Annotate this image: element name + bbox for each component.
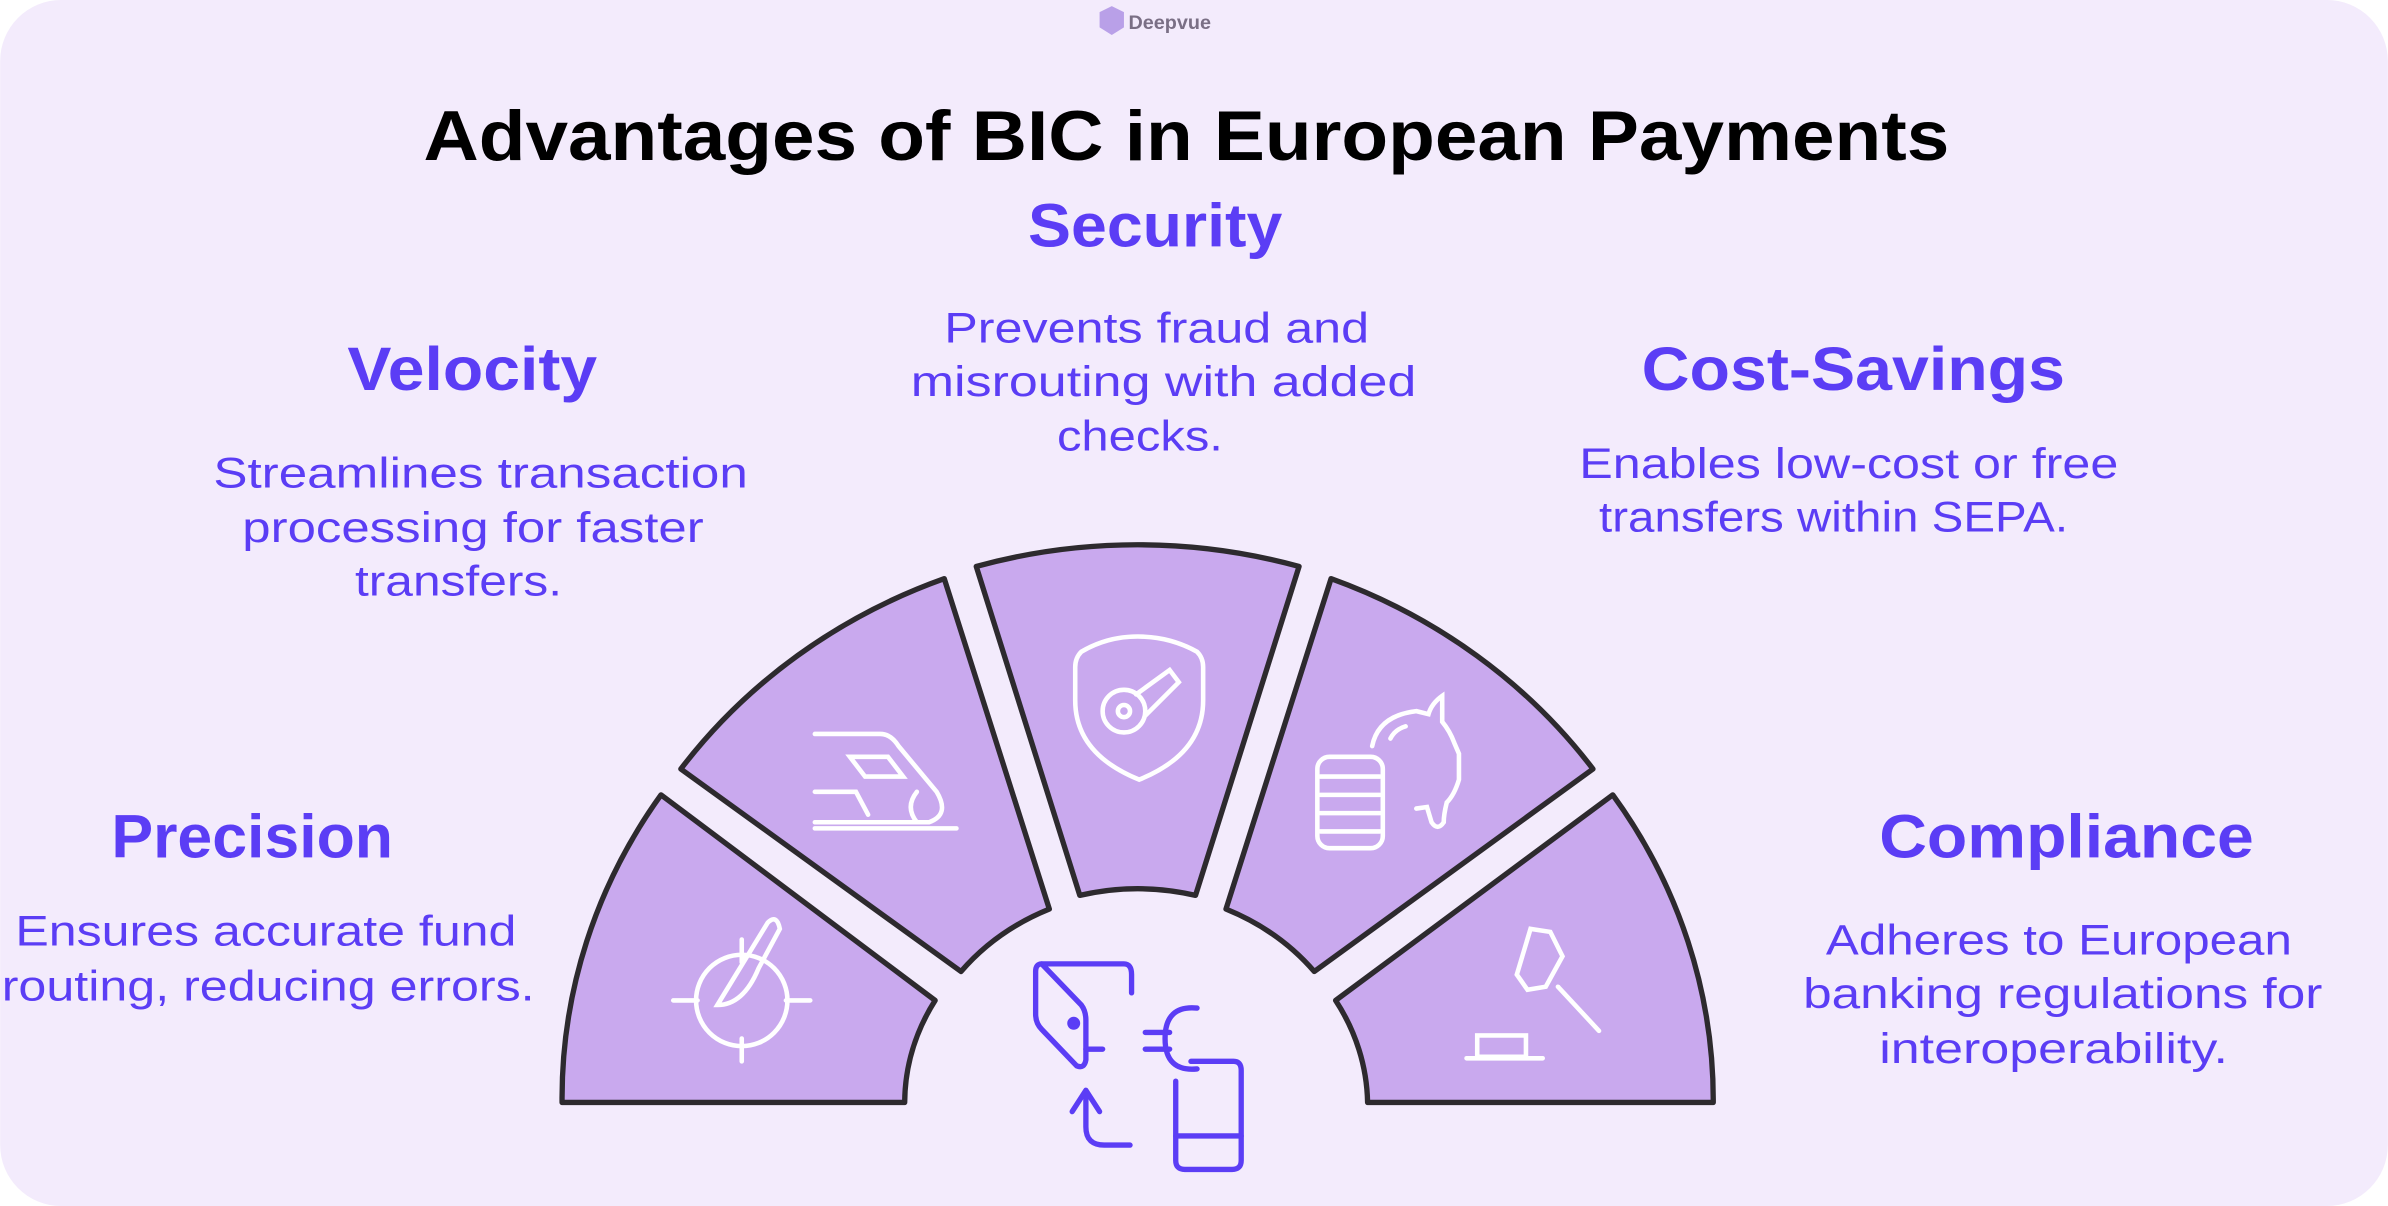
text: security: Prevents fraud and bbox=[944, 305, 1369, 353]
text: security: checks. bbox=[1057, 413, 1223, 461]
text: precision bbox=[2, 908, 535, 1010]
fan chart bbox=[562, 545, 1713, 1102]
text: compliance: interoperability. bbox=[1879, 1025, 2228, 1073]
text: velocity bbox=[213, 449, 748, 605]
text: velocity: Streamlines transaction bbox=[213, 449, 748, 497]
icon: target with knife bbox=[673, 919, 810, 1061]
text: velocity: transfers. bbox=[355, 557, 562, 605]
text: compliance bbox=[1803, 917, 2322, 1073]
heading: Security: Security bbox=[1028, 192, 1282, 260]
heading: Velocity: Velocity bbox=[347, 335, 597, 403]
text: security: misrouting with added bbox=[911, 358, 1416, 406]
text: precision: routing, reducing errors. bbox=[2, 962, 535, 1010]
logo bbox=[1100, 6, 1211, 35]
text: security bbox=[911, 305, 1416, 461]
segment: precision bbox=[562, 795, 935, 1102]
heading: Compliance: Compliance bbox=[1879, 802, 2254, 870]
title: Advantages of BIC in European Payments bbox=[424, 97, 1949, 175]
text: compliance: banking regulations for bbox=[1803, 970, 2322, 1018]
text: cost-savings: Enables low-cost or free bbox=[1579, 440, 2118, 488]
segment: compliance bbox=[1336, 795, 1713, 1102]
text: cost-savings bbox=[1579, 440, 2118, 541]
icon: fast train bbox=[815, 734, 956, 828]
text: precision: Ensures accurate fund bbox=[15, 908, 516, 956]
icon: shield with key bbox=[1075, 636, 1203, 780]
segment: security bbox=[976, 545, 1299, 895]
heading: Cost-Savings: Cost-Savings bbox=[1642, 335, 2065, 403]
icon: gavel bbox=[1467, 929, 1599, 1058]
text: velocity: processing for faster bbox=[242, 504, 704, 552]
logo: Deepvue bbox=[1129, 12, 1211, 34]
text: cost-savings: transfers within SEPA. bbox=[1599, 493, 2068, 541]
icon: piggy bank and coins bbox=[1317, 696, 1459, 848]
segment: cost-savings bbox=[1226, 579, 1593, 972]
heading: Precision: Precision bbox=[111, 802, 393, 870]
text: compliance: Adheres to European bbox=[1826, 917, 2292, 965]
segment: velocity bbox=[681, 579, 1049, 972]
icon: center payment transfer bbox=[1036, 964, 1241, 1169]
